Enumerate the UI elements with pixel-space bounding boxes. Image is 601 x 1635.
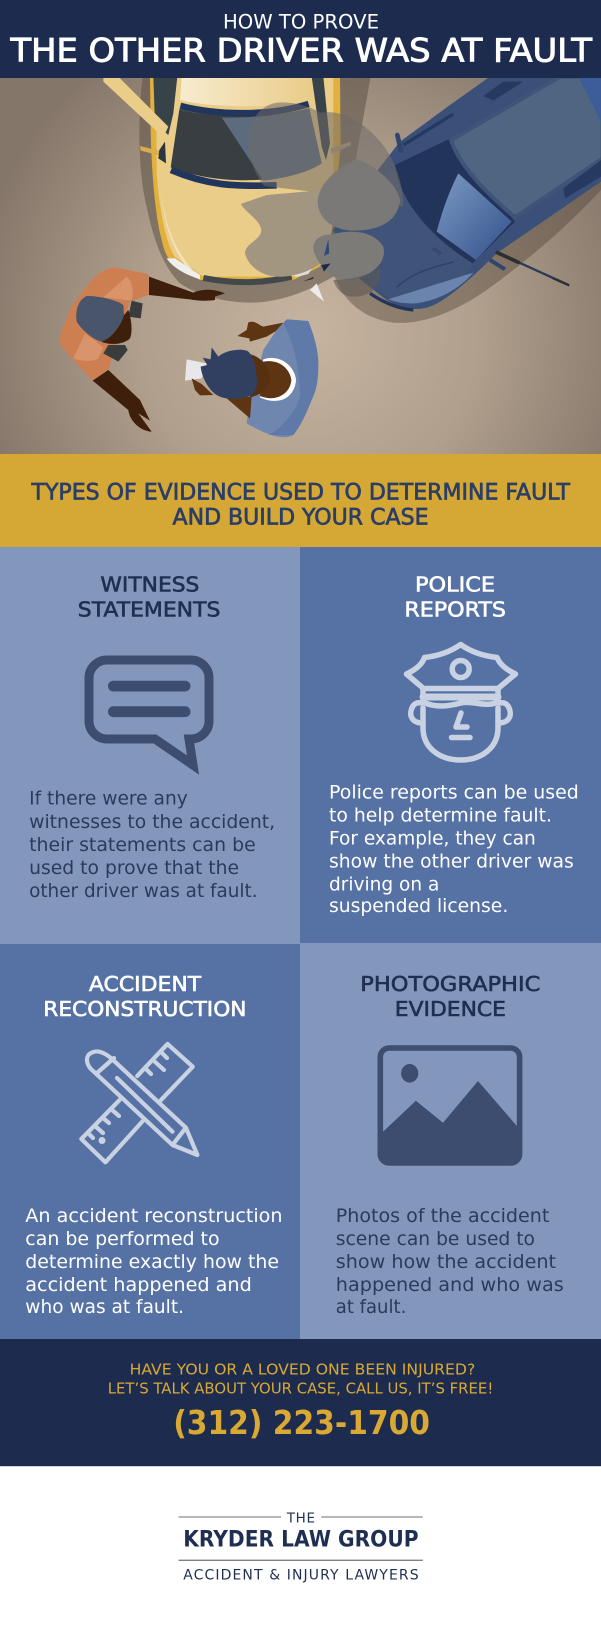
accident text: [25, 1206, 283, 1318]
accident heading: RECONSTRUCTION: [43, 997, 246, 1021]
heading lines: TYPES OF EVIDENCE USED TO DETERMINE FAULT: [30, 480, 571, 505]
blue car shadow: [330, 180, 601, 323]
logo: the kryder law group: [179, 1511, 423, 1583]
police heading: [404, 573, 506, 622]
icon: photo frame: [380, 1048, 520, 1163]
police text: suspended license.: [329, 896, 508, 917]
police text: show the other driver was: [329, 852, 574, 872]
photographic heading: EVIDENCE: [395, 997, 506, 1021]
person: orange shirt with camera: [60, 267, 225, 432]
header banner: [0, 0, 601, 78]
photographic text: at fault.: [336, 1297, 406, 1318]
police text: to help determine fault.: [329, 806, 552, 826]
police text: Police reports can be used: [329, 782, 579, 804]
blue car: [333, 77, 601, 310]
witness heading: [78, 573, 220, 622]
heading lines: AND BUILD YOUR CASE: [172, 505, 428, 530]
logo: the kryder law group: THE: [286, 1511, 315, 1527]
photographic text: Photos of the accident: [336, 1206, 549, 1227]
witness text: other driver was at fault.: [29, 881, 258, 902]
broken glass fragments: [303, 239, 331, 302]
call to action band: [0, 1339, 601, 1467]
heading lines: [30, 480, 571, 530]
panel: accident reconstruction: [0, 944, 300, 1339]
police heading: POLICE: [415, 573, 495, 597]
panel: police reports: [300, 547, 601, 943]
icon: speech bubble: [89, 660, 209, 765]
photographic heading: [360, 972, 540, 1021]
accident text: determine exactly how the: [25, 1252, 279, 1273]
accident text: accident happened and: [25, 1275, 252, 1296]
photographic text: scene can be used to: [336, 1229, 535, 1250]
icon: pencil and ruler: [81, 1044, 197, 1162]
accident text: can be performed to: [25, 1229, 220, 1250]
police text: driving on a: [329, 874, 439, 896]
accident text: who was at fault.: [25, 1297, 184, 1318]
logo: the kryder law group: KRYDER LAW GROUP: [183, 1528, 419, 1553]
call to action text: [108, 1360, 493, 1397]
yellow car: [103, 73, 371, 303]
witness text: used to prove that the: [29, 858, 239, 879]
smoke: [241, 102, 403, 297]
call to action text: LET’S TALK ABOUT YOUR CASE, CALL US, IT’S FREE!: [108, 1379, 493, 1397]
police text: [329, 782, 579, 917]
photographic heading: PHOTOGRAPHIC: [360, 972, 540, 996]
photographic text: [336, 1206, 564, 1318]
witness heading: STATEMENTS: [78, 598, 220, 622]
witness heading: WITNESS: [100, 573, 199, 597]
gold section heading: [0, 454, 601, 547]
title: THE OTHER DRIVER WAS AT FAULT: [9, 32, 592, 70]
accident heading: [43, 972, 246, 1021]
police text: For example, they can: [329, 828, 536, 850]
photographic text: happened and who was: [336, 1275, 564, 1296]
illustration: two drivers at a car accident: [0, 73, 601, 454]
panel: photographic evidence: [300, 943, 601, 1339]
panel: witness statements: [0, 547, 300, 944]
witness text: [29, 788, 275, 902]
person: blue shirt with notepad: [185, 319, 318, 437]
witness text: witnesses to the accident,: [29, 812, 275, 833]
icon: police officer: [406, 644, 516, 760]
header: how to prove: HOW TO PROVE: [223, 10, 379, 33]
witness text: their statements can be: [29, 835, 256, 856]
police heading: REPORTS: [404, 598, 506, 622]
photographic text: show how the accident: [336, 1252, 556, 1273]
call to action text: HAVE YOU OR A LOVED ONE BEEN INJURED?: [130, 1360, 475, 1378]
witness text: If there were any: [29, 788, 188, 810]
accident text: An accident reconstruction: [25, 1206, 283, 1227]
logo: the kryder law group: ACCIDENT & INJURY LAWYERS: [183, 1567, 419, 1583]
phone number: (312) 223-1700: [173, 1403, 430, 1442]
accident heading: ACCIDENT: [89, 972, 202, 996]
